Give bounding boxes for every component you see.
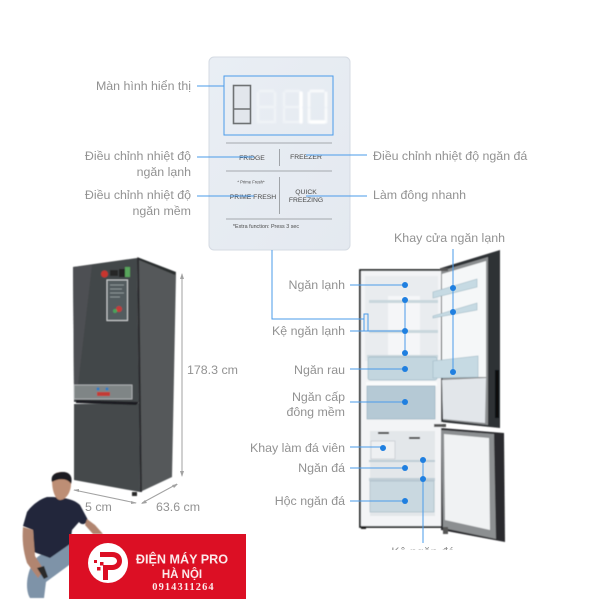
button labels: PRIME FRESH	[230, 194, 276, 201]
label: display: Màn hình hiển thị	[96, 79, 191, 93]
label: soft freeze adjust: ngăn mềm	[132, 204, 191, 218]
open fridge	[360, 250, 505, 542]
logo banner	[69, 534, 246, 599]
callout: fridge adjust	[85, 149, 254, 179]
sticker: red badge	[101, 270, 108, 278]
shelves	[367, 300, 438, 358]
button labels: FREEZING	[289, 197, 323, 204]
callout: Ngăn đá: Ngăn đá	[298, 461, 345, 475]
hair	[52, 472, 72, 484]
label: quick freezing: Làm đông nhanh	[373, 188, 466, 202]
upper door	[441, 250, 500, 428]
button labels: * Prime Fresh*	[237, 180, 265, 184]
callout: soft freeze adjust	[85, 188, 254, 218]
callout: Ngăn cấp đông mềm	[286, 390, 408, 419]
freezer shelves	[369, 460, 435, 481]
callout: Ngăn cấp đông mềm: đông mềm	[286, 405, 345, 419]
callout: Kệ ngăn đá	[385, 457, 465, 562]
sticker: info card	[107, 280, 128, 320]
ice tray	[371, 441, 395, 459]
callout: Khay cửa ngăn lạnh	[394, 231, 505, 375]
lower door	[74, 403, 140, 492]
label: fridge adjust: Điều chỉnh nhiệt độ	[85, 149, 191, 163]
callout: Khay làm đá viên	[250, 441, 386, 455]
label: height: 178.3 cm	[187, 363, 238, 377]
cabinet	[360, 270, 442, 527]
label: soft freeze adjust: Điều chỉnh nhiệt độ	[85, 188, 191, 202]
closed fridge	[73, 257, 176, 496]
digit display	[258, 91, 326, 122]
button labels: *Extra function: Press 3 sec	[233, 224, 299, 230]
icon: fridge display glyph	[234, 86, 250, 124]
callout: Hộc ngăn đá: Hộc ngăn đá	[275, 494, 345, 508]
fridge compartment interior	[365, 276, 438, 361]
hinges	[434, 268, 448, 534]
corner post	[137, 258, 142, 492]
dimension: depth	[141, 484, 200, 514]
freezer vents	[378, 432, 420, 439]
side panel	[137, 258, 176, 492]
person	[23, 472, 103, 598]
icon: logo P	[88, 543, 128, 583]
head	[52, 472, 71, 500]
dimension: height	[180, 273, 238, 477]
callout: Ngăn rau: Ngăn rau	[294, 363, 345, 377]
phone: 0914311264	[152, 582, 215, 593]
brand name: ĐIỆN MÁY PRO	[136, 552, 228, 566]
upper door inner	[441, 257, 488, 425]
door handle recess	[495, 370, 499, 418]
feet	[132, 492, 137, 496]
upper door highlight	[73, 265, 92, 385]
dimension: width	[73, 489, 137, 514]
panel: control panel	[209, 57, 350, 250]
divider lines	[226, 143, 332, 219]
soft-freeze drawer	[367, 386, 435, 419]
lower door	[441, 428, 505, 542]
label: fridge adjust: ngăn lạnh	[137, 165, 191, 179]
button labels	[230, 154, 323, 230]
label: freezer adjust: Điều chỉnh nhiệt độ ngăn đá	[373, 149, 527, 163]
callout: Ngăn cấp đông mềm: Ngăn cấp	[292, 390, 345, 404]
top edge	[137, 257, 176, 275]
brand city: HÀ NỘI	[162, 568, 202, 581]
callout: Ngăn rau	[294, 363, 408, 377]
label: width: 5 cm	[85, 500, 112, 514]
foot	[361, 526, 366, 529]
freezer interior	[370, 431, 435, 516]
callout: Ngăn lạnh	[288, 278, 408, 292]
button labels: FREEZER	[290, 154, 322, 161]
door gap	[76, 400, 139, 405]
callout: Ngăn lạnh: Ngăn lạnh	[288, 278, 345, 292]
door bins	[433, 279, 478, 378]
sticker: feature strip	[74, 385, 132, 399]
legs	[27, 538, 76, 598]
button labels: FRIDGE	[239, 155, 265, 162]
soft-freeze band	[366, 382, 437, 386]
freezer drawer	[370, 481, 434, 512]
callout: Kệ ngăn đá: Kệ ngăn đá	[391, 545, 455, 559]
hand on box	[85, 519, 103, 534]
drill	[37, 566, 48, 579]
callout: display	[96, 76, 333, 135]
label: depth: 63.6 cm	[156, 500, 200, 514]
shirt	[23, 497, 88, 558]
vegetable drawer	[368, 357, 437, 380]
callout: Khay làm đá viên: Khay làm đá viên	[250, 441, 345, 455]
connector: kệ ngăn lạnh	[272, 250, 368, 331]
arm	[23, 527, 44, 578]
back wall	[388, 296, 420, 361]
callout: Hộc ngăn đá	[275, 494, 408, 508]
callout: Kệ ngăn lạnh	[272, 297, 408, 356]
callout: Kệ ngăn lạnh: Kệ ngăn lạnh	[272, 324, 345, 338]
upper door	[73, 258, 139, 402]
callout: Khay cửa ngăn lạnh: Khay cửa ngăn lạnh	[394, 231, 505, 245]
callout: Ngăn đá	[298, 461, 408, 475]
button labels: QUICK	[295, 189, 317, 196]
sticker: display and energy	[110, 267, 130, 277]
lower door inner	[441, 430, 496, 539]
